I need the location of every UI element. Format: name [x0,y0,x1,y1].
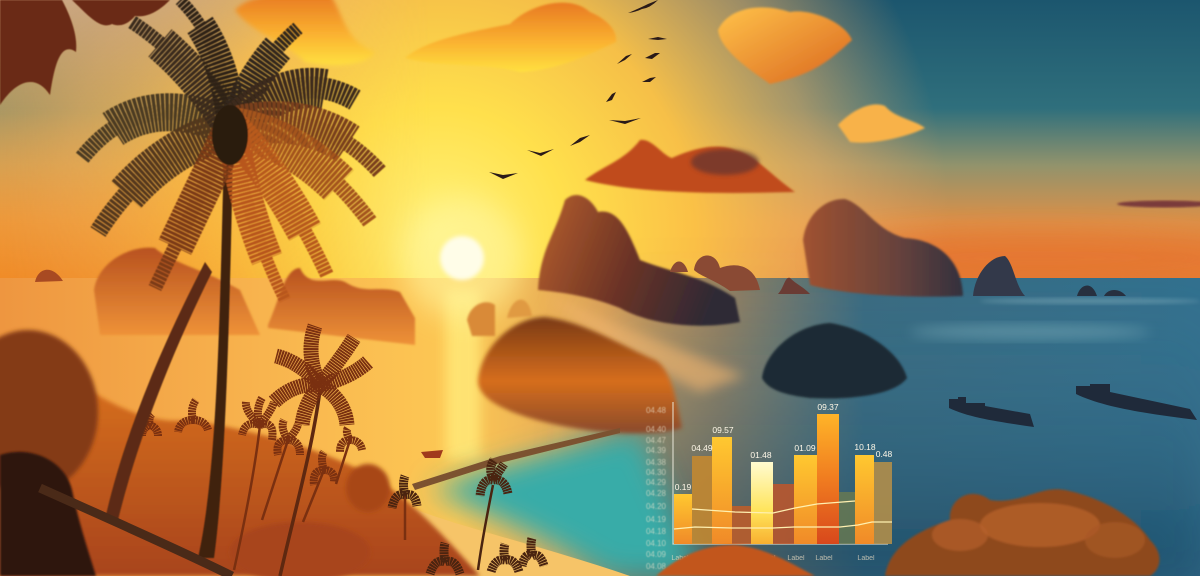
x-axis labels: Label [787,555,805,562]
palm trunks [198,150,233,558]
palm: beach [392,460,544,574]
bird silhouettes [628,0,658,13]
cloud: streak far right [1117,200,1200,208]
palm: medium centre [274,326,368,576]
cloud: top left [235,0,375,65]
x-axis labels: Label [815,555,833,562]
axes [673,402,888,544]
rock: left large [94,248,260,335]
x-axis labels: Label [716,555,734,562]
palm: small group [142,398,405,570]
birds [489,0,667,179]
bar value labels: 09.37 [817,402,839,412]
rock: central tall [538,195,740,326]
ship: right [1076,384,1197,420]
y-axis labels: 04.40 [646,425,667,434]
rock: small near sun [467,302,495,336]
y-axis labels: 04.28 [646,489,667,498]
rock: foreground dark island [762,323,907,398]
rock: distant islet [778,278,810,294]
rock: foreground orange island [478,317,682,433]
main palm tree [82,0,380,558]
bar chart [646,402,893,571]
y-axis labels: 04.39 [646,446,667,455]
cloud: top centre [405,3,616,72]
orange tree under chart [656,545,815,576]
bar value labels: 01.09 [794,443,816,453]
y-axis labels: 04.18 [646,527,667,536]
rock: tiny left [35,270,63,282]
branch [40,488,232,576]
x-axis labels [671,555,875,562]
palm trunk left [106,262,212,520]
top-left foliage [0,0,170,105]
sun [402,198,522,318]
y-axis labels: 04.47 [646,436,667,445]
y-axis labels: 04.19 [646,515,667,524]
trend lines [674,501,892,529]
y-axis labels: 04.08 [646,562,667,571]
bar value labels: 0.19 [675,482,692,492]
clouds [235,0,1200,208]
rock: small near sun right [507,300,532,318]
orange jungle foreground [0,330,480,576]
sea [0,278,1200,576]
rock: right large [803,199,963,297]
bottom-right tree [885,489,1159,576]
y-axis labels: 04.29 [646,478,667,487]
y-axis labels: 04.30 [646,468,667,477]
rock: far right islets [1077,285,1126,296]
beach [405,505,630,576]
bar value labels: 01.48 [750,450,772,460]
bar value labels [675,402,893,492]
boats and pier [412,384,1197,490]
y-axis labels: 04.38 [646,458,667,467]
y-axis labels: 04.09 [646,550,667,559]
y-axis labels: 04.10 [646,539,667,548]
y-axis labels [646,406,667,571]
bars [674,414,892,544]
palm fronds [82,0,380,300]
lagoon [430,430,700,576]
x-axis labels: Label [857,555,875,562]
y-axis labels: 04.20 [646,502,667,511]
sky background [0,0,1200,285]
small palm trees [142,326,544,576]
small boat [421,450,443,458]
x-axis labels: Label [758,555,776,562]
x-axis labels: Label [671,555,689,562]
rock: mid-left cluster [268,268,415,345]
cloud: dark centre [585,140,795,193]
bar value labels: 09.57 [712,425,734,435]
y-axis labels: 04.48 [646,406,667,415]
cloud: small right [838,104,925,143]
pier [412,428,620,490]
cloud: top right [718,7,852,84]
bar value labels: 10.18 [854,442,876,452]
ship: middle [949,397,1034,427]
bottom-left branch [0,452,232,576]
bar value labels: 0.48 [876,449,893,459]
rock: central small cluster [670,255,760,291]
bar value labels: 04.49 [691,443,713,453]
rock: right small [973,256,1025,296]
limestone rocks on horizon [35,195,1126,433]
